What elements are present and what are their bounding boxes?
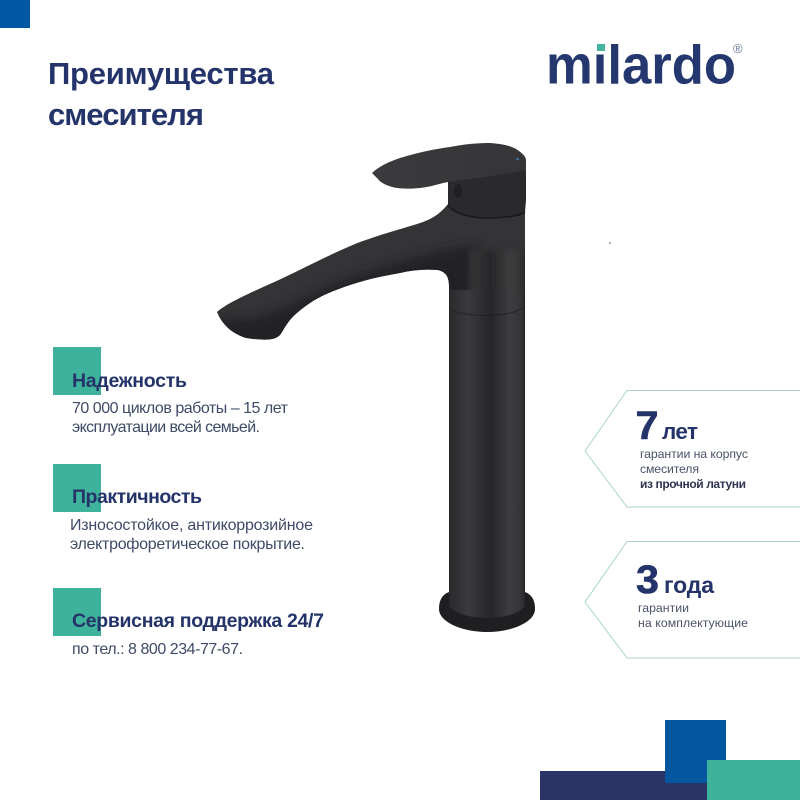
teal marker (53, 347, 101, 395)
faucet base (439, 592, 535, 632)
faucet cartridge (448, 170, 526, 218)
faucet column (449, 280, 525, 618)
text block: по тел.: 8 800 234-77-67. (72, 641, 243, 658)
logo: milardo: ® (733, 41, 743, 56)
title (48, 56, 275, 132)
logo: milardo: milardo (546, 34, 736, 96)
teal marker (53, 464, 101, 512)
panel: 7 year warranty (585, 390, 800, 507)
faucet neck blend (470, 250, 525, 290)
faucet seam (450, 307, 525, 316)
text block: на комплектующие (638, 616, 748, 630)
number (636, 404, 698, 448)
faucet cartridge ring (448, 205, 525, 218)
teal marker (53, 588, 101, 636)
text block (640, 447, 748, 491)
text block: из прочной латуни (640, 477, 746, 491)
number: лет (662, 419, 698, 444)
panel: practicality (53, 464, 313, 553)
faucet lever screw (454, 184, 462, 198)
text block: 70 000 циклов работы – 15 лет (72, 400, 289, 417)
text block: смесителя (640, 462, 699, 476)
panel: service support (53, 588, 324, 658)
text block (72, 400, 289, 436)
stray dot (609, 242, 611, 244)
heading: Практичность (72, 486, 202, 508)
text block: гарантии на корпус (640, 447, 748, 461)
faucet image (210, 143, 535, 632)
heading: Сервисная поддержка 24/7 (72, 610, 324, 632)
faucet spout underside shade (218, 244, 478, 340)
title: смесителя (48, 97, 204, 132)
arrow frame (585, 542, 800, 658)
panel: reliability (53, 347, 289, 436)
number (636, 558, 714, 602)
heading: Надежность (72, 370, 187, 392)
arrow frame (585, 390, 800, 507)
faucet lever mark (516, 158, 519, 160)
corner square (0, 0, 30, 28)
faucet spout (217, 204, 525, 340)
text block: эксплуатации всей семьей. (72, 419, 260, 436)
number: 3 (636, 558, 659, 602)
text block: гарантии (638, 601, 689, 615)
number: 7 (636, 404, 658, 448)
faucet lever (372, 143, 526, 189)
text block (70, 517, 313, 553)
text block (638, 601, 748, 630)
text block: электрофоретическое покрытие. (70, 536, 305, 553)
number: года (664, 572, 714, 598)
panel: 3 year warranty (585, 542, 800, 658)
text block: Износостойкое, антикоррозийное (70, 517, 313, 534)
corner blocks (540, 720, 800, 800)
title: Преимущества (48, 56, 275, 91)
